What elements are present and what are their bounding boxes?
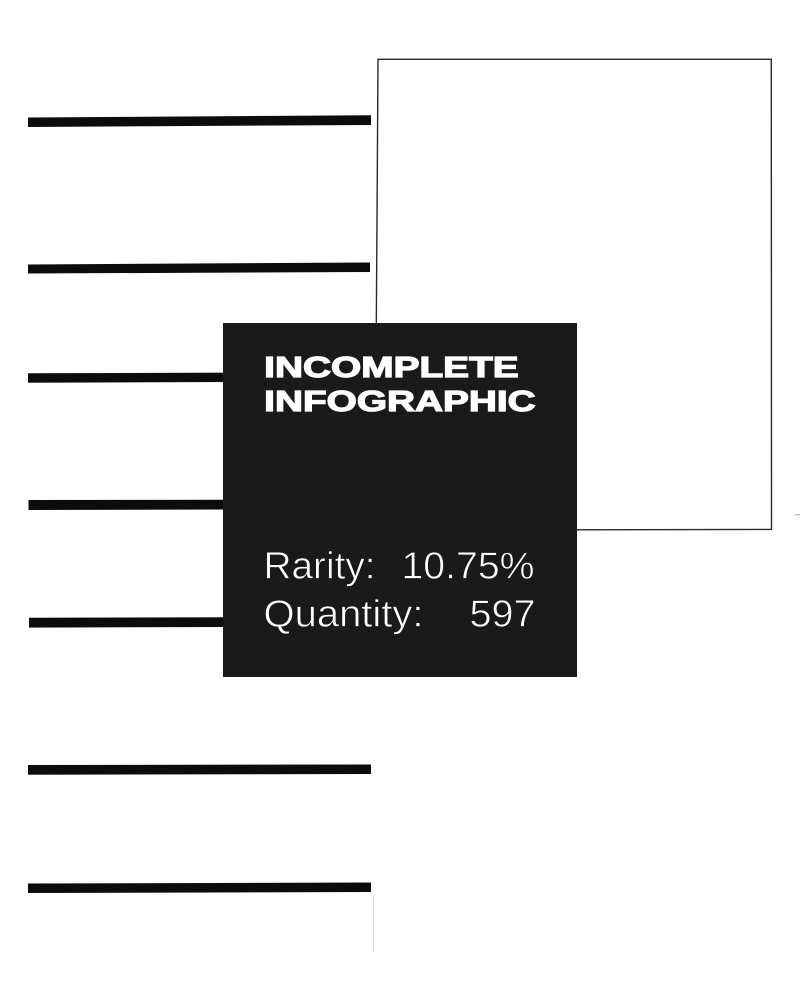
rarity stat — [264, 546, 534, 588]
heading: INFOGRAPHIC — [264, 386, 536, 418]
quantity stat — [264, 594, 536, 636]
quantity stat: 597 — [470, 594, 536, 636]
dark title panel — [223, 323, 577, 677]
rarity stat: 10.75% — [402, 546, 534, 588]
heading: INCOMPLETE — [264, 352, 519, 384]
empty outlined frame — [376, 59, 772, 530]
heading — [264, 352, 536, 418]
faint scan marks — [374, 514, 800, 952]
quantity stat: Quantity: — [264, 594, 424, 636]
rarity stat: Rarity: — [264, 546, 376, 588]
black horizontal bars — [28, 115, 371, 893]
